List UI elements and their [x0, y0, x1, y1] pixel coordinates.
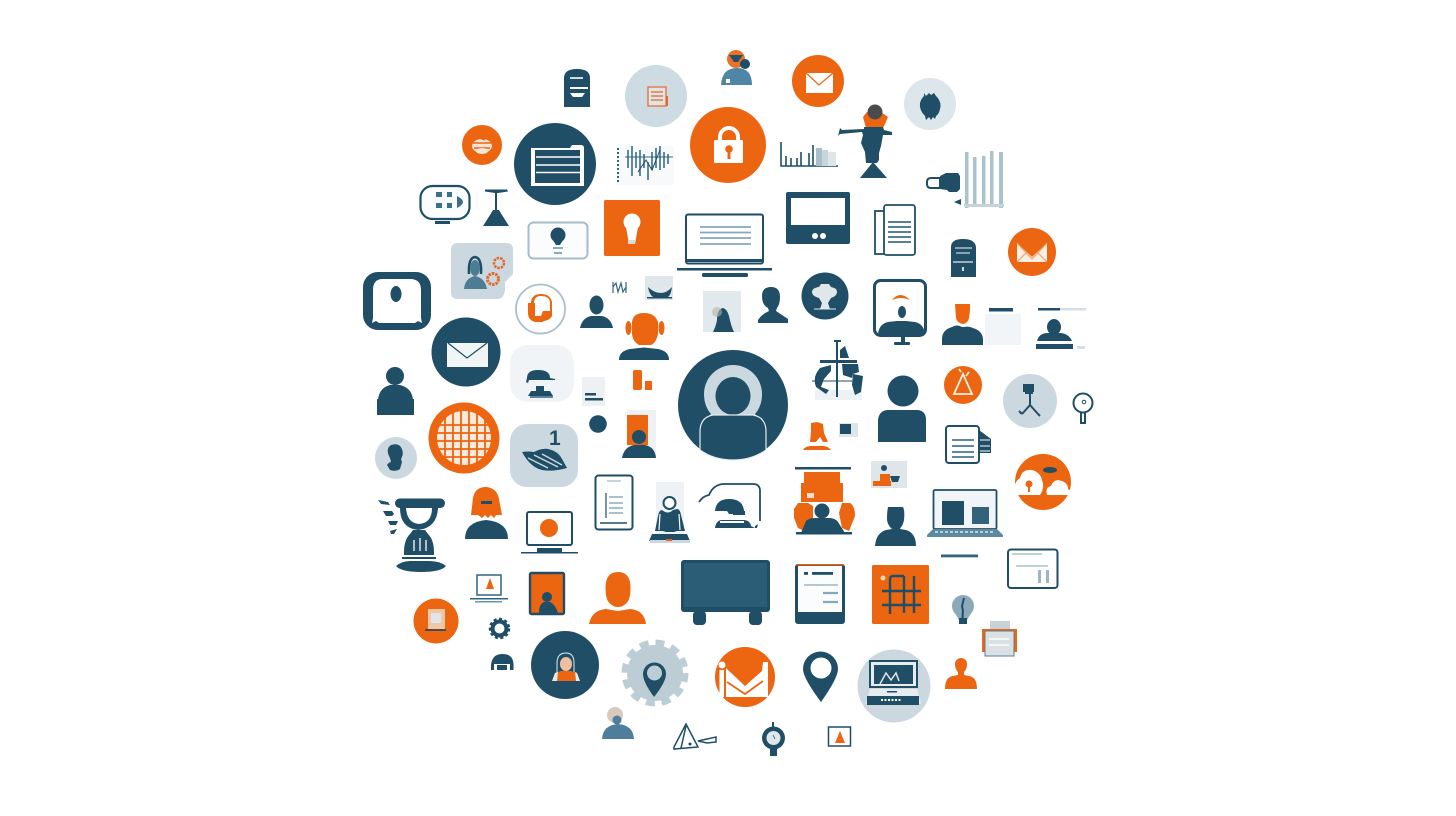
icon: orange circle mail figures: [715, 647, 775, 707]
icon: document with tabs: [946, 426, 991, 463]
icon: orange person small: [945, 658, 977, 689]
chart: waveform: [617, 146, 674, 185]
icon: pale circle with retro monitor: [858, 650, 930, 722]
icon: orange circle lock: [690, 107, 766, 183]
icon: small orange circle: [462, 125, 502, 165]
icon: pale box with silhouette: [703, 291, 741, 332]
icon: pale box with boat: [645, 276, 673, 300]
icon: orange circle envelope: [792, 55, 844, 107]
icon: orange square hash grid: [872, 565, 929, 624]
icon: line tent: [674, 724, 716, 749]
icon: person with orange head: [721, 50, 752, 85]
icon: stacked documents: [875, 205, 915, 255]
icon: orange person with small monitor: [803, 422, 858, 450]
icon: person two: [758, 287, 788, 323]
icon: printer: [982, 621, 1017, 656]
icon: orange circle with book: [414, 598, 458, 644]
icon: bluish person: [602, 707, 634, 739]
icon: small helmet: [491, 654, 514, 670]
icon: orange wire globe: [428, 402, 500, 474]
icon: tablet document: [596, 476, 632, 530]
icon: orange desk with person: [794, 467, 855, 534]
chart: bars with baseline: [781, 142, 838, 166]
icon: framed bulb: [528, 222, 588, 258]
icon: framed orange portrait: [530, 573, 564, 614]
icon: pale tile with number and leaf: 1: [549, 427, 561, 450]
icon: stopwatch: [762, 722, 785, 756]
icon: laptop with text lines: [677, 214, 772, 277]
icon: person with bars: [1036, 308, 1086, 349]
icon: gear small: [490, 619, 509, 638]
icon: person with orange head and pale card: [942, 304, 1021, 345]
icon: navy person bust: [878, 376, 926, 442]
icon: meditating figure: [649, 482, 690, 543]
chart: pale bars with device: [927, 151, 1004, 208]
icon: orange hooded person: [465, 487, 508, 539]
icon: orange square bulb: [604, 200, 660, 256]
icon: laptop with panels: [927, 490, 1003, 537]
icon: navy circle with list window: [514, 123, 596, 205]
icon: magnifier key: [1074, 394, 1092, 423]
icon: monitor with person and umbrella: [874, 280, 926, 345]
icon: app screen document: [795, 564, 845, 624]
icon: central person avatar: [678, 350, 788, 460]
icon: navy circle with woman portrait: [531, 631, 599, 699]
icon: laptop with orange dot: [521, 512, 578, 554]
icon: person three: [875, 507, 916, 546]
icon: trophy hourglass with speed lines: [378, 498, 446, 572]
icon: navy dot: [589, 415, 607, 433]
icon: orange blocks: [633, 370, 652, 390]
icon: card with orange panel and person: [622, 410, 656, 458]
icon: server: [951, 239, 976, 277]
icon: orange person large: [589, 572, 646, 624]
icon: person one: [580, 296, 613, 328]
icon: pale rounded card with helmet: [510, 345, 574, 402]
icon: location pin: [803, 652, 838, 702]
icon: small waveform glyph: [613, 282, 626, 293]
icon: pale circle with report: [625, 65, 687, 127]
icon: navy rounded app tile: [363, 272, 431, 330]
icon: pale tile with number and leaf: [510, 424, 578, 487]
icon: small laptop: [470, 575, 508, 602]
icon: chat bubble with helmet: [699, 484, 760, 528]
icon: pale tile with bars: [582, 377, 605, 406]
decorative bar: [941, 554, 978, 557]
icon: pale circle head: [375, 437, 417, 479]
icon: pale circle with stand: [1003, 374, 1057, 428]
icon: pale tile with small person: [871, 461, 907, 488]
icon: ring with orange headset: [516, 284, 565, 334]
icon: speech bubble with squares: [420, 186, 470, 224]
icon: person at desk: [377, 367, 414, 415]
icon: navy circle envelope: [432, 318, 500, 386]
icon: orange circle flask: [944, 366, 982, 404]
icon: orange headed person: [619, 313, 669, 360]
icon: figure on a pedestal: [838, 104, 892, 178]
icon: orange circle envelope right: [1008, 228, 1056, 276]
icon: cracked bulb: [952, 595, 974, 624]
icon: browser window: [1008, 550, 1058, 588]
icon: pale circle with blob: [904, 78, 956, 130]
icon: small framed image: [828, 727, 850, 746]
icon: orange circle clouds: [1015, 454, 1071, 510]
icon: gray gear with pin: [624, 642, 686, 704]
icon: dark document tag: [564, 69, 590, 107]
icon: T lamp: [483, 190, 509, 226]
icon: globe with signposts: [812, 341, 863, 400]
icon: large navy screen: [681, 560, 770, 625]
icon: navy tablet: [786, 192, 850, 244]
icon: pale card with person and gears: [451, 243, 513, 299]
icon: navy circle figure: [802, 272, 848, 320]
